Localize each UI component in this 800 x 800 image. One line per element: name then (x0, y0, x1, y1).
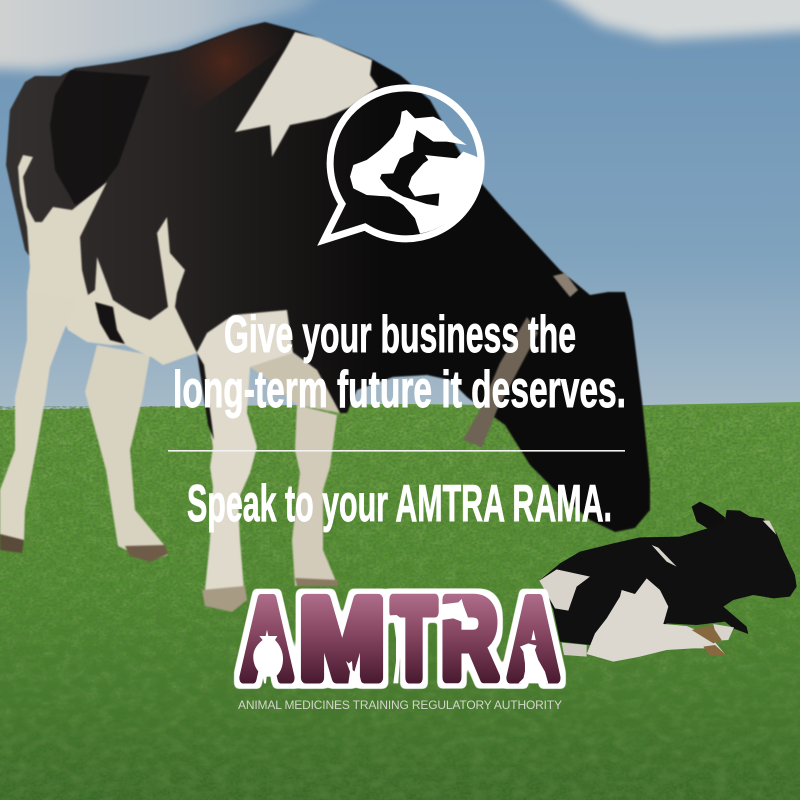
cow leg and tail (385, 615, 405, 683)
near rear leg (0, 290, 77, 542)
hoof far front (295, 578, 338, 586)
headline (173, 306, 626, 419)
hoof front near (202, 586, 247, 612)
clouds (0, 0, 800, 70)
cow body (6, 22, 650, 532)
far rear leg (85, 345, 168, 561)
logo wordmark (241, 576, 559, 703)
horse head (442, 599, 472, 628)
sheep (253, 636, 283, 683)
AMTRA logo (238, 576, 562, 712)
calf rump patch (539, 569, 590, 611)
headline line 1: Give your business the (224, 306, 576, 364)
calf knee (713, 624, 734, 641)
calf body (540, 510, 797, 645)
logo wordmark: T (392, 576, 436, 703)
cat (346, 661, 362, 683)
udder spot (95, 302, 125, 344)
logo animals (253, 599, 548, 683)
calf belly and legs (587, 578, 726, 662)
bubble outline (324, 88, 481, 240)
calf rear underside (562, 643, 587, 657)
calf (539, 502, 797, 662)
shoulder white patch (235, 32, 378, 157)
sky background (0, 0, 800, 420)
far front leg (292, 405, 338, 586)
calf back stripe (652, 545, 677, 567)
brown back shading (165, 22, 290, 115)
calf hooves (692, 625, 726, 656)
chat bubble logo icon (324, 88, 482, 240)
logo tagline: ANIMAL MEDICINES TRAINING REGULATORY AUTHORITY (238, 698, 562, 712)
calf ear (692, 502, 725, 530)
hoof rear near (0, 534, 24, 553)
logo wordmark: A (241, 576, 293, 703)
inner leg shade (197, 353, 214, 440)
inner thigh (250, 353, 340, 413)
logo wordmark: A (508, 576, 559, 703)
collar lower strip (463, 317, 538, 447)
dark flank hollow (50, 70, 150, 205)
cow (0, 22, 650, 612)
calf head stripe (763, 521, 777, 535)
animal silhouettes (350, 110, 482, 234)
grass field (0, 402, 800, 800)
near front leg and chest (197, 310, 293, 590)
logo wordmark: M (299, 576, 385, 703)
collar top (553, 273, 578, 297)
rear white patch (18, 155, 197, 365)
logo wordmark: R (441, 576, 498, 703)
dog (518, 643, 548, 683)
hoof far rear (125, 545, 168, 562)
